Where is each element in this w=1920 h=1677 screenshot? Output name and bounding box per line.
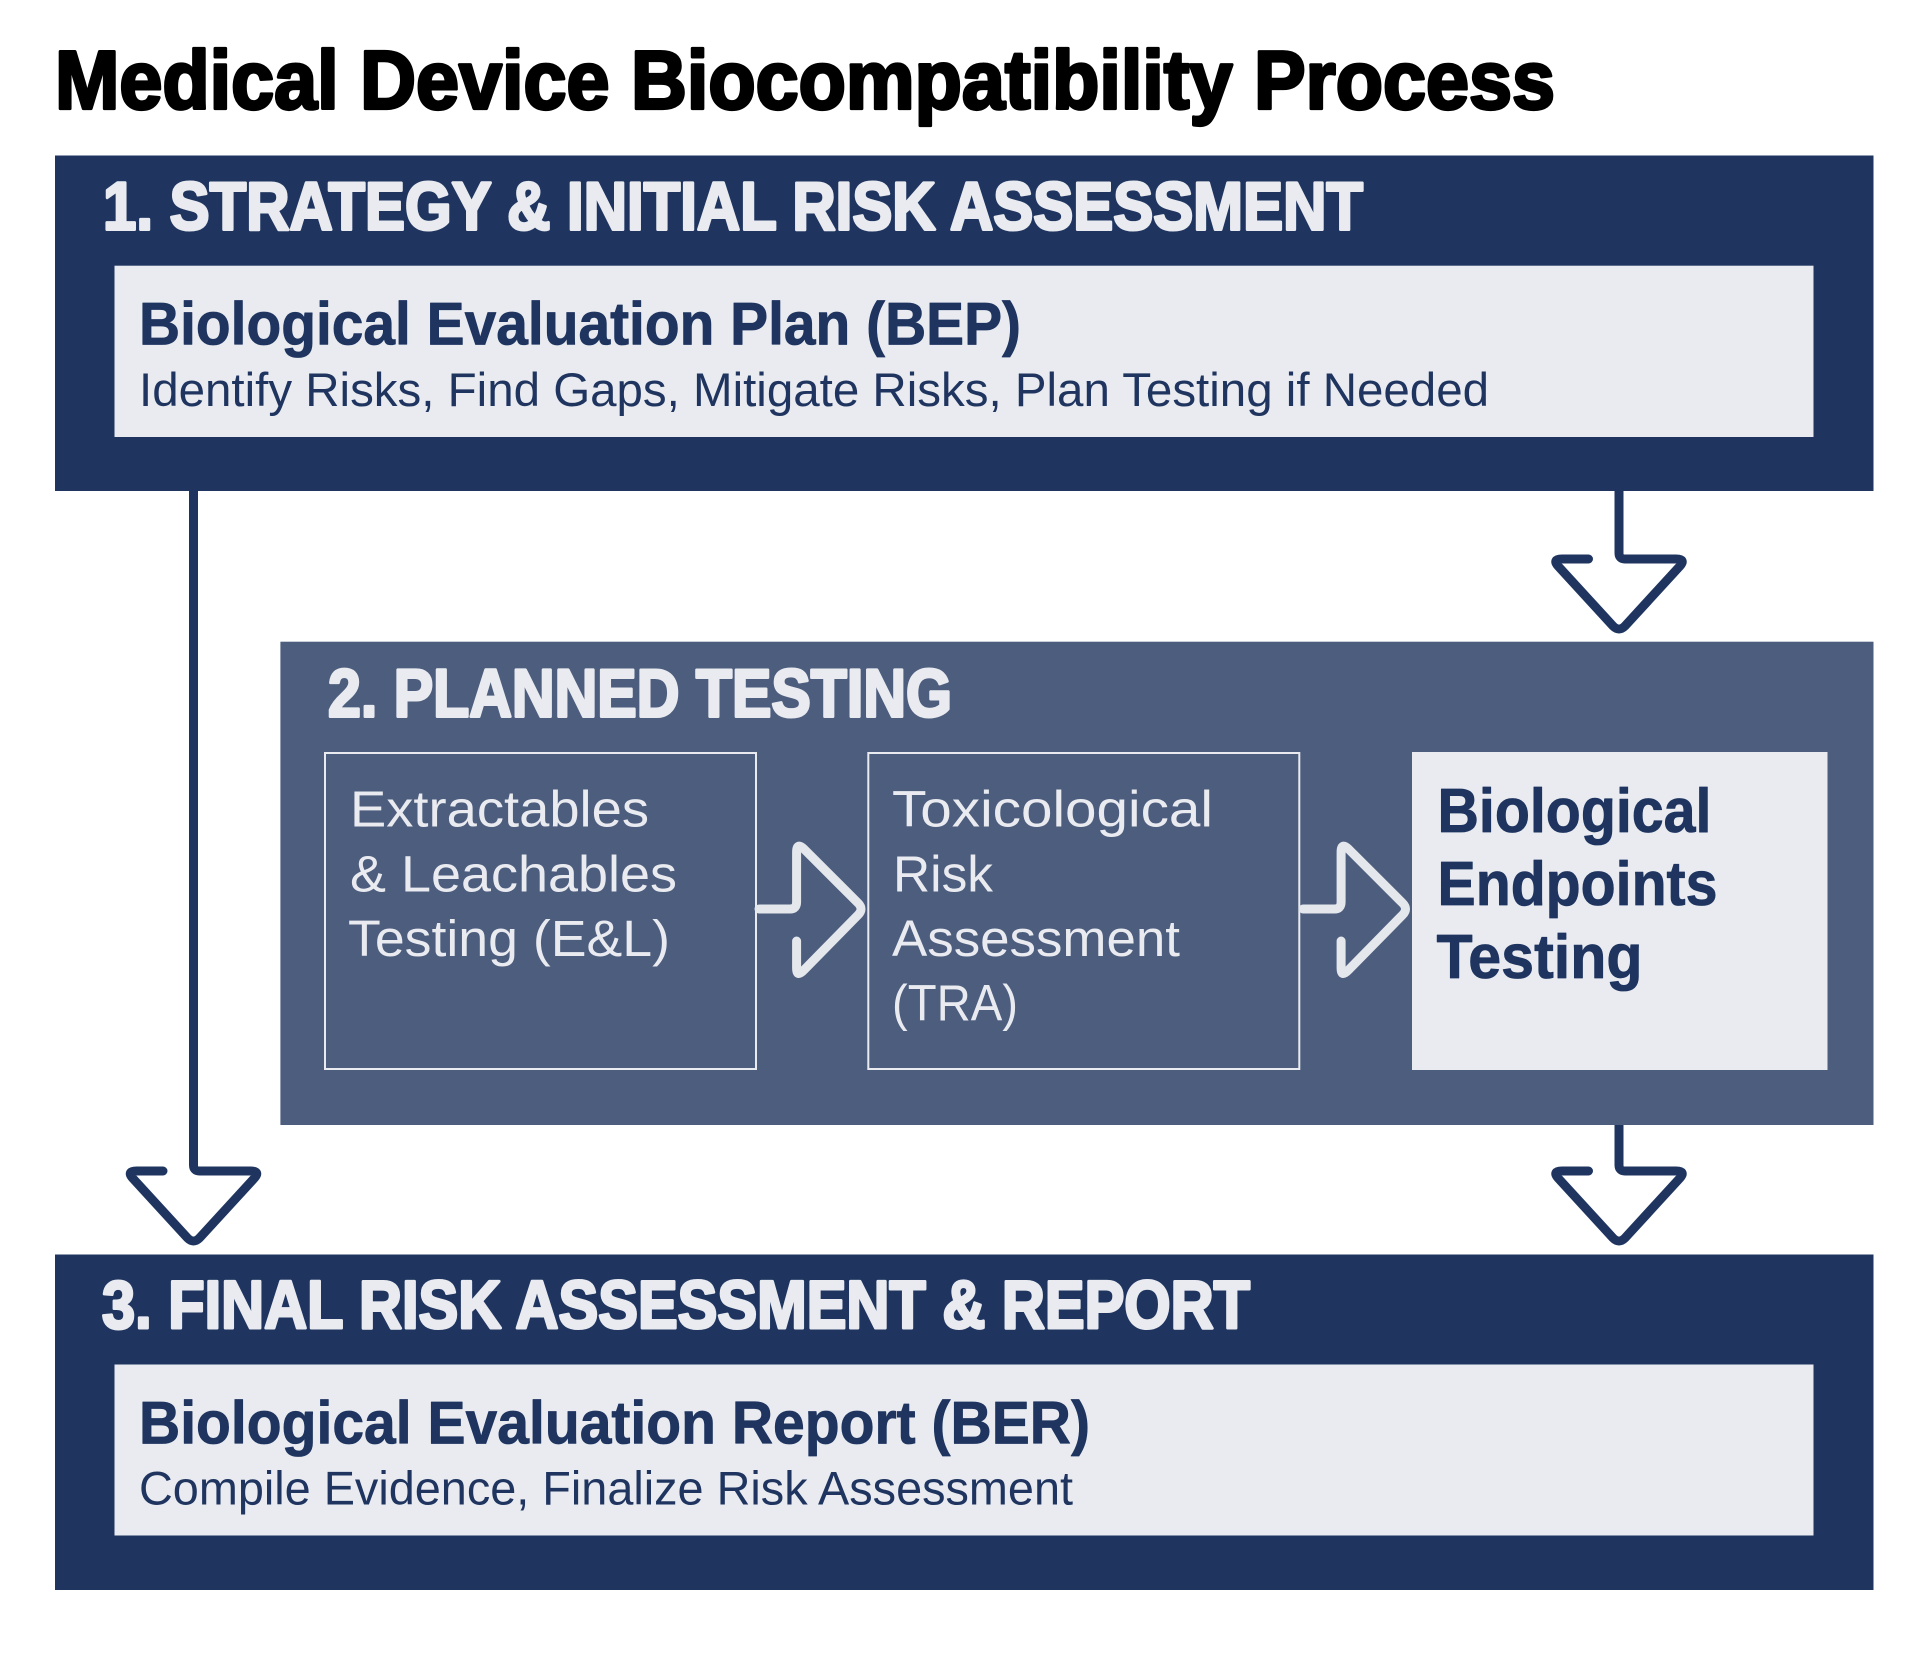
card: biological evaluation plan [114, 266, 1814, 437]
box: toxicological risk assessment [868, 753, 1299, 1069]
arrow: step 1 down to step 3 [130, 491, 257, 1241]
box: biological endpoints testing: Testing [1436, 923, 1642, 992]
panel: 3. final risk assessment and report [55, 1254, 1874, 1590]
box: extractables and leachables testing: & Leachables [350, 846, 677, 903]
panel: 1. strategy and initial risk assessment [55, 156, 1874, 491]
box: extractables and leachables testing [325, 753, 756, 1069]
box: toxicological risk assessment: Risk [893, 846, 993, 903]
box: toxicological risk assessment: (TRA) [892, 974, 1018, 1032]
card heading: Biological Evaluation Plan (BEP) [139, 291, 1021, 358]
arrow: step 1 down to step 2 [1556, 491, 1682, 629]
panel background [280, 642, 1873, 1125]
arrow: toxicological to biological endpoints [1303, 846, 1406, 974]
card description: Identify Risks, Find Gaps, Mitigate Risks, Plan Testing if Needed [139, 363, 1489, 416]
arrow: extractables to toxicological [759, 846, 861, 974]
heading: step 1: 1. STRATEGY & INITIAL RISK ASSESSMENT [103, 168, 1363, 244]
panel: 2. planned testing [280, 642, 1873, 1125]
box: biological endpoints testing: Biological [1438, 777, 1712, 846]
box: toxicological risk assessment: Assessment [892, 910, 1180, 967]
arrow: step 2 down to step 3 [1556, 1125, 1682, 1241]
box: biological endpoints testing: Endpoints [1438, 850, 1718, 919]
box: extractables and leachables testing: Extractables [350, 781, 649, 838]
box: toxicological risk assessment: Toxicological [892, 781, 1213, 838]
heading: step 3: 3. FINAL RISK ASSESSMENT & REPORT [102, 1267, 1250, 1343]
card heading: Biological Evaluation Report (BER) [139, 1390, 1090, 1456]
panel background [55, 1254, 1874, 1590]
card: biological evaluation report [114, 1364, 1814, 1536]
panel background [55, 156, 1874, 491]
box: biological endpoints testing [1412, 752, 1828, 1070]
card description: Compile Evidence, Finalize Risk Assessment [139, 1462, 1073, 1514]
heading: step 2: 2. PLANNED TESTING [328, 656, 952, 732]
box: extractables and leachables testing: Testing (E&L) [348, 910, 670, 967]
title: Medical Device Biocompatibility Process [55, 34, 1555, 126]
